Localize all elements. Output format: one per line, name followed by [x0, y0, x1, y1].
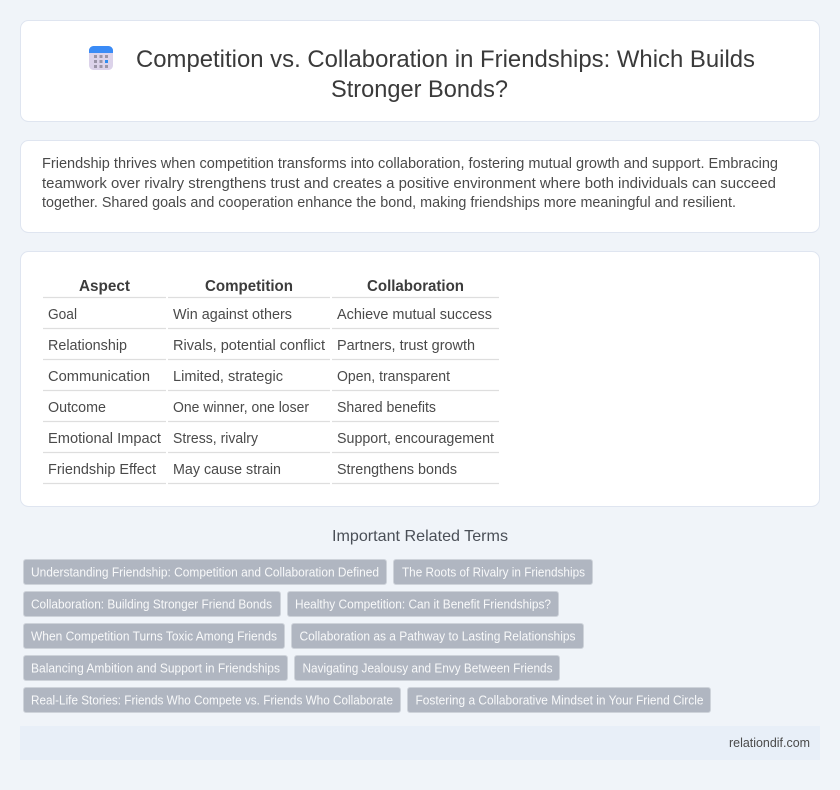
title: Stronger Bonds? [331, 76, 508, 103]
tag [24, 560, 386, 584]
table row: friendship effect: Friendship Effect [48, 462, 156, 478]
table row: emotional impact: Emotional Impact [48, 431, 161, 447]
table row: goal: Goal [48, 307, 77, 323]
table row: relationship: Relationship [48, 338, 127, 354]
heading: related terms: Important Related Terms [332, 528, 508, 545]
tag [292, 624, 584, 648]
table row: emotional impact [48, 431, 494, 447]
tag: Navigating Jealousy and Envy Between Friends [302, 660, 553, 676]
table row: emotional impact: Support, encouragement [337, 431, 494, 447]
table row: friendship effect: May cause strain [173, 462, 281, 478]
tag: When Competition Turns Toxic Among Friends [31, 628, 277, 644]
tag: Understanding Friendship: Competition and Collaboration Defined [31, 564, 379, 580]
related term tags [24, 560, 710, 712]
table row: outcome [48, 400, 436, 416]
tag: Real-Life Stories: Friends Who Compete vs. Friends Who Collaborate [31, 692, 393, 708]
table row: goal [48, 307, 492, 323]
tag: Fostering a Collaborative Mindset in Your Friend Circle [416, 692, 704, 708]
table header: Competition [205, 278, 293, 295]
title: Competition vs. Collaboration in Friendships: Which Builds [136, 46, 755, 73]
table row: goal: Achieve mutual success [337, 307, 492, 323]
title [136, 46, 755, 103]
tag [24, 688, 400, 712]
table row: communication: Communication [48, 369, 150, 385]
table row: outcome: Shared benefits [337, 400, 436, 416]
table row: emotional impact: Stress, rivalry [173, 431, 259, 447]
table row: friendship effect: Strengthens bonds [337, 462, 457, 478]
table header: Collaboration [367, 278, 464, 295]
table header: Aspect [79, 278, 131, 295]
table row: relationship: Rivals, potential conflict [173, 338, 325, 354]
panel: comparison table [20, 252, 820, 506]
table row: friendship effect [48, 462, 457, 478]
table row: outcome: Outcome [48, 400, 106, 416]
table header [79, 278, 464, 295]
table row: relationship [48, 338, 475, 354]
tag [394, 560, 592, 584]
table row: communication: Open, transparent [337, 369, 450, 385]
tag [24, 624, 284, 648]
table row: relationship: Partners, trust growth [337, 338, 475, 354]
footer: relationdif.com [729, 735, 810, 750]
tag [294, 656, 560, 680]
panel: header [20, 20, 820, 122]
text block: introduction [42, 156, 778, 211]
tag: Collaboration as a Pathway to Lasting Relationships [300, 628, 576, 644]
tag: The Roots of Rivalry in Friendships [402, 564, 585, 580]
text block: introduction: Friendship thrives when competition transforms into collaboration, fostering mutual growth and support. Embracing [42, 156, 778, 172]
tag: Collaboration: Building Stronger Friend Bonds [31, 596, 272, 612]
tag [24, 592, 280, 616]
panel: introduction [20, 140, 820, 232]
tag [24, 656, 288, 680]
text block: introduction: together. Shared goals and cooperation enhance the bond, making friendships more meaningful and resilient. [42, 195, 736, 211]
text block: introduction: teamwork over rivalry strengthens trust and creates a positive environment where both individuals can succeed [42, 176, 776, 192]
footer [20, 726, 820, 760]
tag: Balancing Ambition and Support in Friendships [31, 660, 280, 676]
table row: communication: Limited, strategic [173, 369, 283, 385]
icon: calendar [89, 46, 113, 70]
tag [288, 592, 558, 616]
table row: communication [48, 369, 450, 385]
tag [408, 688, 710, 712]
table row: goal: Win against others [173, 307, 292, 323]
tag: Healthy Competition: Can it Benefit Friendships? [295, 596, 551, 612]
table row: outcome: One winner, one loser [173, 400, 309, 416]
